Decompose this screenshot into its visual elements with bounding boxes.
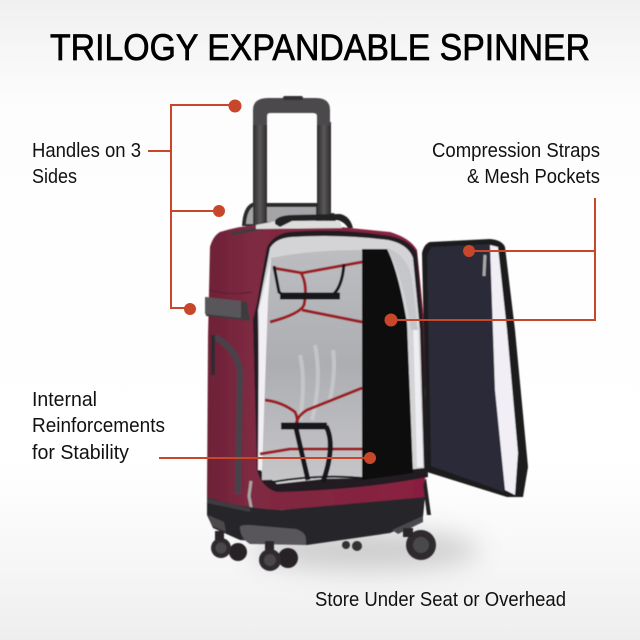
label: handles	[32, 140, 141, 188]
base shell	[207, 497, 425, 545]
label: handles: Handles on 3	[32, 140, 141, 162]
opening frame	[253, 231, 428, 492]
door flap	[422, 239, 528, 497]
rear panel	[262, 250, 362, 480]
red straps	[260, 262, 362, 454]
side handle	[205, 297, 250, 321]
floor shadow	[250, 530, 480, 570]
title: TRILOGY EXPANDABLE SPINNER	[50, 27, 590, 68]
left white strip	[258, 258, 271, 470]
mesh panel	[362, 249, 413, 480]
callout: compression straps and mesh pockets	[384, 198, 595, 326]
label: reinforcements: Internal	[32, 389, 97, 411]
door white lining	[490, 245, 518, 495]
door zipper pull	[484, 255, 485, 276]
label: compression straps	[432, 140, 600, 188]
buckle straps	[272, 264, 362, 482]
lining walls	[258, 236, 424, 484]
callout: reinforcements	[159, 452, 376, 464]
wheels	[211, 528, 436, 571]
label: compression straps: & Mesh Pockets	[467, 166, 600, 188]
label: compression straps: Compression Straps	[432, 140, 600, 162]
side pocket zipper	[215, 337, 240, 494]
luggage photo	[205, 96, 528, 571]
label: handles: Sides	[32, 166, 77, 188]
callout lines: handles	[148, 105, 235, 308]
top rear pocket	[242, 203, 337, 226]
label: reinforcements: for Stability	[32, 442, 129, 464]
right inner strip	[413, 320, 423, 467]
label: reinforcements	[32, 389, 165, 464]
top carry handle	[256, 221, 342, 229]
label: reinforcements: Reinforcements	[32, 415, 165, 437]
label: storage: Store Under Seat or Overhead	[315, 589, 566, 611]
side zipper pull	[249, 481, 252, 512]
callout dots: handles	[184, 100, 242, 315]
telescoping handle	[253, 96, 331, 227]
suitcase body	[207, 225, 425, 512]
